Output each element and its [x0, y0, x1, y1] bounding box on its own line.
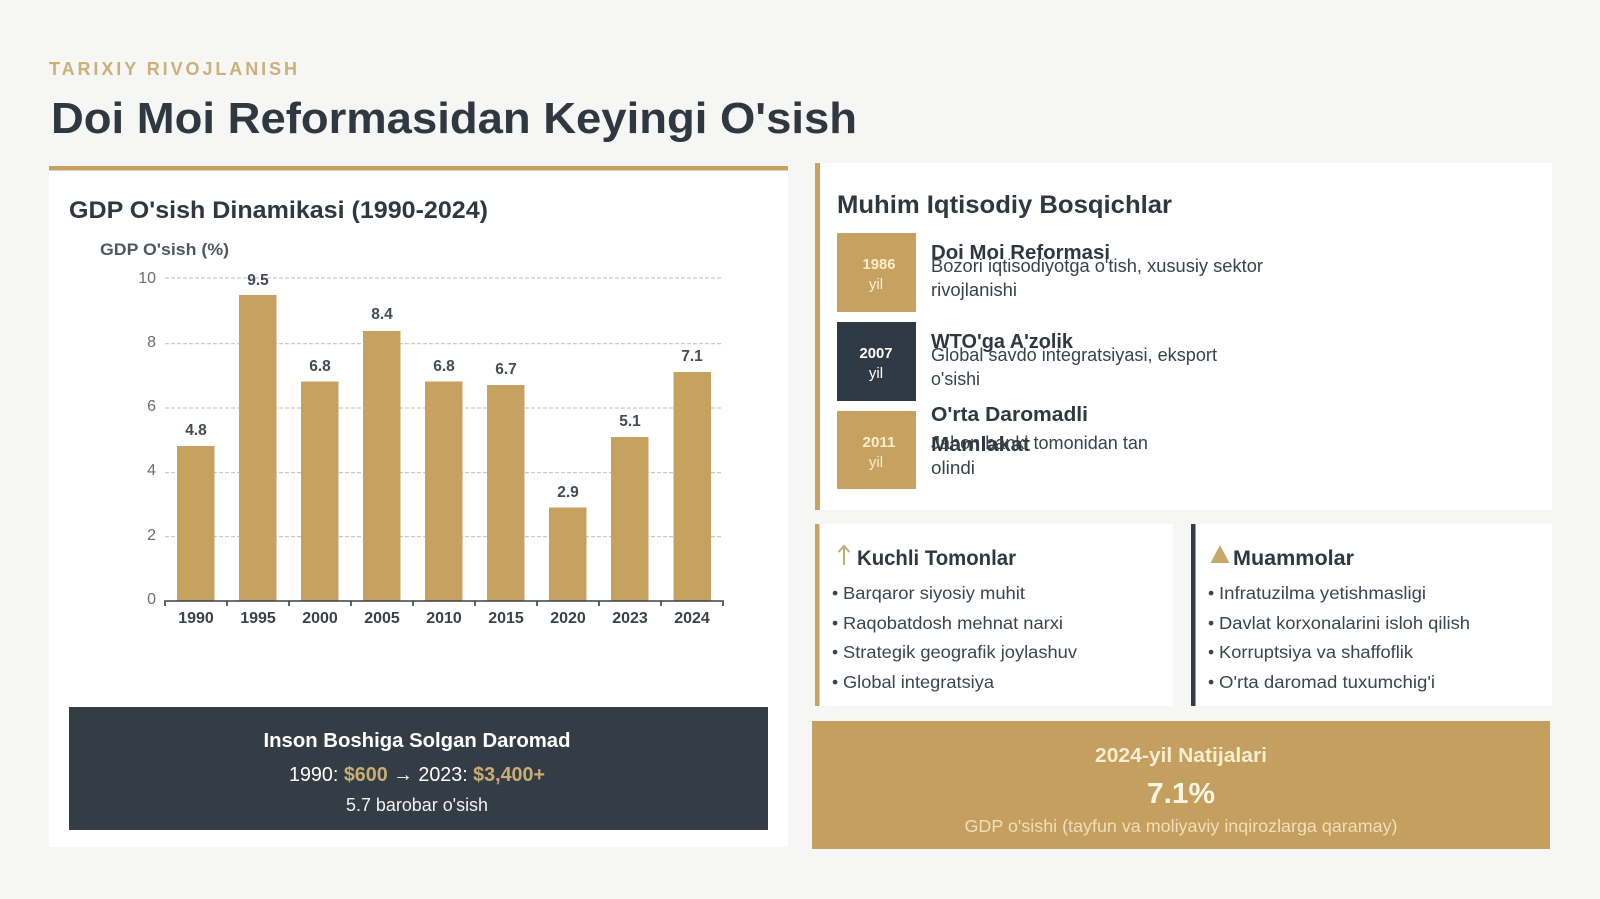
milestone 2011: O'rta Daromadli [931, 404, 1088, 426]
callout: income per capita [69, 707, 768, 830]
strengths list: • [832, 583, 838, 603]
strengths list: • [832, 613, 838, 633]
x axis labels: 2020 [550, 610, 586, 627]
milestone 2011: Jahon banki tomonidan tan [931, 433, 1148, 453]
y axis title: GDP O'sish (%) [100, 240, 229, 259]
panel: 2024 results [812, 721, 1550, 849]
problems list: • [1208, 642, 1214, 662]
milestone 2007 [837, 322, 1217, 401]
bar chart [100, 240, 723, 627]
icon: up arrow [838, 546, 850, 565]
y axis labels [138, 270, 156, 608]
bar value labels [185, 272, 703, 501]
callout: income per capita: 5.7 barobar o'sish [346, 795, 488, 815]
problems list: Davlat korxonalarini isloh qilish [1219, 613, 1470, 633]
y axis labels: 2 [147, 527, 156, 544]
x axis labels: 2000 [302, 610, 338, 627]
bar value labels: 6.8 [309, 358, 331, 375]
problems list: • [1208, 613, 1214, 633]
bar value labels: 7.1 [681, 348, 703, 365]
x axis labels: 2015 [488, 610, 524, 627]
callout: income per capita: 1990: $600 → 2023: $3,400+ [289, 764, 545, 786]
milestone 2011: 2011 [862, 434, 896, 451]
problems list [1208, 583, 1470, 692]
x axis labels: 2010 [426, 610, 462, 627]
eyebrow label: TARIXIY RIVOJLANISH [49, 59, 297, 79]
panel: milestones [815, 163, 1552, 510]
problems list: O'rta daromad tuxumchig'i [1219, 672, 1435, 692]
strengths list: • [832, 672, 838, 692]
milestone 1986: Bozori iqtisodiyotga o'tish, xususiy sektor [931, 256, 1263, 276]
problems list: Infratuzilma yetishmasligi [1219, 583, 1426, 603]
y axis labels: 8 [147, 334, 156, 351]
milestone 1986: 1986 [862, 256, 896, 273]
panel: strengths [815, 524, 1173, 706]
panel: GDP growth chart [49, 166, 788, 847]
milestone 1986 [837, 233, 1263, 312]
strengths list: Global integratsiya [843, 672, 994, 692]
icon: warning triangle [1210, 545, 1230, 563]
y axis labels: 4 [147, 462, 156, 479]
panel: 2024 results: 2024-yil Natijalari [1095, 745, 1267, 767]
milestone 2011 [837, 404, 1148, 489]
title: Doi Moi Reformasidan Keyingi O'sish [51, 94, 857, 143]
y axis labels: 10 [138, 270, 156, 287]
strengths list: • [832, 642, 838, 662]
milestone 2011: Mamlakat [931, 434, 1030, 456]
milestone 1986: rivojlanishi [931, 280, 1017, 300]
strengths list: Barqaror siyosiy muhit [843, 583, 1025, 603]
x axis labels: 2005 [364, 610, 400, 627]
chart heading: GDP O'sish Dinamikasi (1990-2024) [69, 197, 488, 224]
milestones heading: Muhim Iqtisodiy Bosqichlar [837, 191, 1172, 219]
problems list: Korruptsiya va shaffoflik [1219, 642, 1413, 662]
milestone 1986: Doi Moi Reformasi [931, 242, 1110, 264]
bar value labels: 9.5 [247, 272, 269, 289]
x axis labels: 2023 [612, 610, 648, 627]
milestone 2007: WTO'ga A'zolik [931, 331, 1074, 353]
strengths list: Raqobatdosh mehnat narxi [843, 613, 1063, 633]
milestone 2007: 2007 [860, 345, 892, 362]
milestone 2007: o'sishi [931, 369, 980, 389]
y axis labels: 6 [147, 398, 156, 415]
strengths list: Strategik geografik joylashuv [843, 642, 1077, 662]
x axis [165, 601, 723, 606]
bar value labels: 5.1 [619, 413, 641, 430]
callout: income per capita: Inson Boshiga Solgan Daromad [264, 730, 570, 752]
milestone 2007: Global savdo integratsiyasi, eksport [931, 345, 1217, 365]
milestone 2011: yil [869, 454, 883, 471]
bar value labels: 6.8 [433, 358, 455, 375]
y axis labels: 0 [147, 591, 156, 608]
problems list: • [1208, 583, 1214, 603]
bar value labels: 6.7 [495, 361, 517, 378]
bar value labels: 2.9 [557, 484, 579, 501]
milestone 1986: yil [869, 276, 883, 293]
strengths list [832, 583, 1077, 692]
bars [177, 295, 711, 601]
milestone 2011: olindi [931, 458, 975, 478]
problems heading: Muammolar [1233, 547, 1354, 570]
panel: problems [1191, 524, 1552, 706]
panel: 2024 results: GDP o'sishi (tayfun va moliyaviy inqirozlarga qaramay) [964, 816, 1398, 836]
milestone 2007: yil [869, 365, 883, 382]
bar value labels: 4.8 [185, 422, 207, 439]
x axis labels: 2024 [674, 610, 710, 627]
x axis labels: 1995 [240, 610, 276, 627]
x axis labels [178, 610, 710, 627]
panel: 2024 results: 7.1% [1147, 778, 1215, 810]
x axis labels: 1990 [178, 610, 214, 627]
bar value labels: 8.4 [371, 306, 393, 323]
problems list: • [1208, 672, 1214, 692]
strengths heading: Kuchli Tomonlar [857, 547, 1016, 570]
